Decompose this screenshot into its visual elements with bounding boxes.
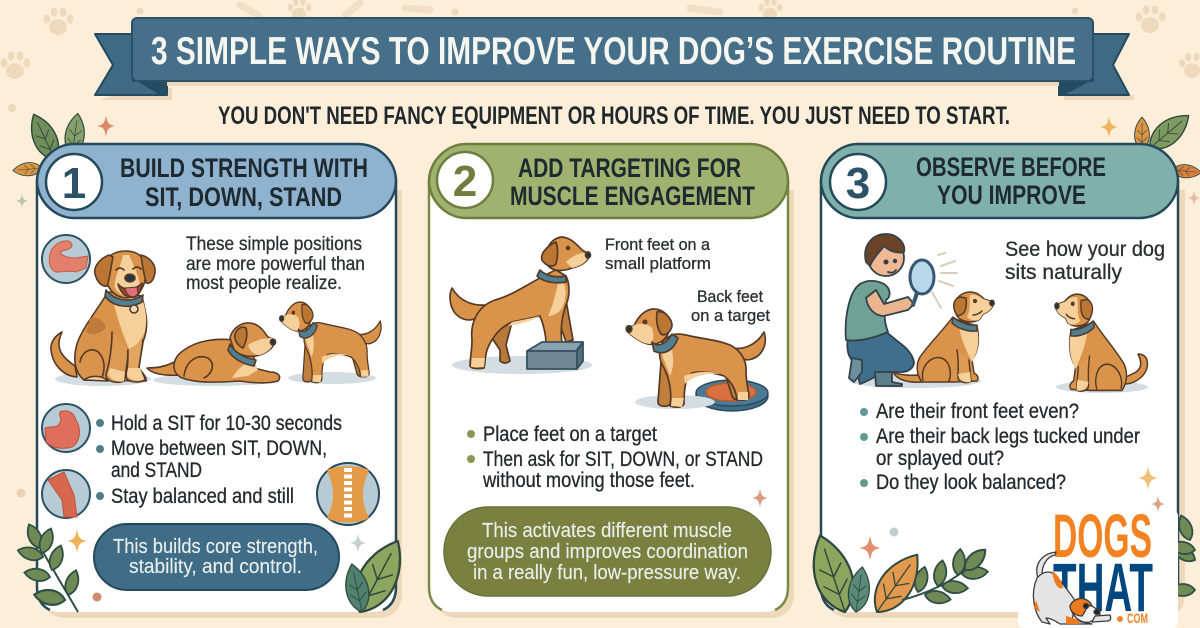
panel 3 heading <box>916 152 1106 210</box>
callout 1: stability, and control. <box>129 556 302 578</box>
panel 2: add targeting <box>429 144 794 618</box>
panel 2 heading <box>510 153 755 211</box>
callout 1: This builds core strength, <box>113 536 318 558</box>
panel 1 heading: BUILD STRENGTH WITH <box>120 153 368 183</box>
bullet list 2: Then ask for SIT, DOWN, or STAND <box>483 448 763 471</box>
bullet list 1: and STAND <box>111 459 202 482</box>
bullet list 3: or splayed out? <box>876 447 1004 470</box>
panel 2 header <box>429 144 788 218</box>
panel 1 heading <box>120 153 368 212</box>
panel 3 card <box>821 180 1185 618</box>
bullet list 2: without moving those feet. <box>482 469 695 492</box>
target caption <box>691 287 770 325</box>
platform caption: Front feet on a <box>605 235 711 254</box>
panel 3 heading: OBSERVE BEFORE <box>916 152 1106 182</box>
observation caption: sits naturally <box>1005 261 1122 284</box>
panel 2 card <box>429 180 794 618</box>
icon: spine <box>317 463 379 525</box>
panel 3 header <box>821 144 1178 218</box>
dog standing <box>280 302 381 384</box>
decorations panel 1 bottom <box>16 488 414 621</box>
intro text <box>186 234 365 294</box>
bullet list 2 <box>467 423 763 492</box>
number badge 1 <box>46 154 102 210</box>
sparkle <box>752 488 768 508</box>
bullet list 3: Are their front feet even? <box>876 400 1079 423</box>
dog sitting naturally <box>1055 294 1148 393</box>
logo: dogs that .com <box>1018 496 1178 628</box>
panel 1 header <box>37 144 396 218</box>
dog lying down <box>147 323 280 386</box>
callout 2: in a really fun, low-pressure way. <box>473 562 741 584</box>
decorations panel 3 bottom <box>803 514 1198 621</box>
logo word com: COM <box>1127 610 1148 626</box>
decorative leaves top left <box>12 110 115 208</box>
intro text: These simple positions <box>186 234 362 255</box>
number badge 3 <box>830 154 886 210</box>
observation caption <box>1005 238 1165 284</box>
person with magnifying glass <box>846 234 981 388</box>
background paw prints and bones <box>1 0 1200 112</box>
intro text: most people realize. <box>186 273 342 294</box>
icon: biceps <box>42 235 90 283</box>
callout 2: This activates different muscle <box>482 520 732 542</box>
bullet list 3: Do they look balanced? <box>876 471 1066 494</box>
bullet list 1: Hold a SIT for 10-30 seconds <box>111 412 342 435</box>
dog on target <box>626 309 765 409</box>
bullet list 1: Move between SIT, DOWN, <box>111 437 327 460</box>
target disc <box>696 380 768 411</box>
bullet list 3: Are their back legs tucked under <box>876 425 1140 448</box>
panel 3 heading: YOU IMPROVE <box>937 180 1086 210</box>
logo dog <box>1033 552 1111 624</box>
platform block <box>527 342 583 369</box>
bullet list 3 <box>860 400 1140 494</box>
panel 1: build strength <box>37 144 402 618</box>
bullet list 1: Stay balanced and still <box>111 485 294 508</box>
panel 2 heading: MUSCLE ENGAGEMENT <box>510 181 755 211</box>
panel 2 heading: ADD TARGETING FOR <box>518 153 741 183</box>
callout 2: groups and improves coordination <box>467 541 748 563</box>
number badge 2: 2 <box>453 157 477 206</box>
callout 1 <box>94 524 339 590</box>
dog on platform <box>450 237 592 374</box>
callout 2 <box>444 507 771 596</box>
platform caption: small platform <box>605 254 711 273</box>
observation caption: See how your dog <box>1005 238 1165 261</box>
dog sitting <box>51 251 155 386</box>
target caption: Back feet <box>697 287 763 306</box>
title banner <box>95 18 1135 100</box>
decorative leaves top right <box>1100 107 1200 205</box>
dog sitting in profile <box>893 292 994 383</box>
bullet list 1 <box>96 412 342 508</box>
intro text: are more powerful than <box>186 254 365 275</box>
panel 1 heading: SIT, DOWN, STAND <box>145 182 342 212</box>
bullet list 2: Place feet on a target <box>483 423 657 446</box>
platform caption <box>605 235 711 273</box>
number badge 2 <box>437 152 493 208</box>
target caption: on a target <box>691 306 770 325</box>
icon: leg muscle <box>42 470 90 518</box>
number badge 3: 3 <box>846 159 870 208</box>
panel 3: observe <box>821 144 1185 618</box>
icon: arm muscle <box>42 404 90 452</box>
number badge 1: 1 <box>62 159 86 208</box>
panel 1 card <box>37 180 402 618</box>
